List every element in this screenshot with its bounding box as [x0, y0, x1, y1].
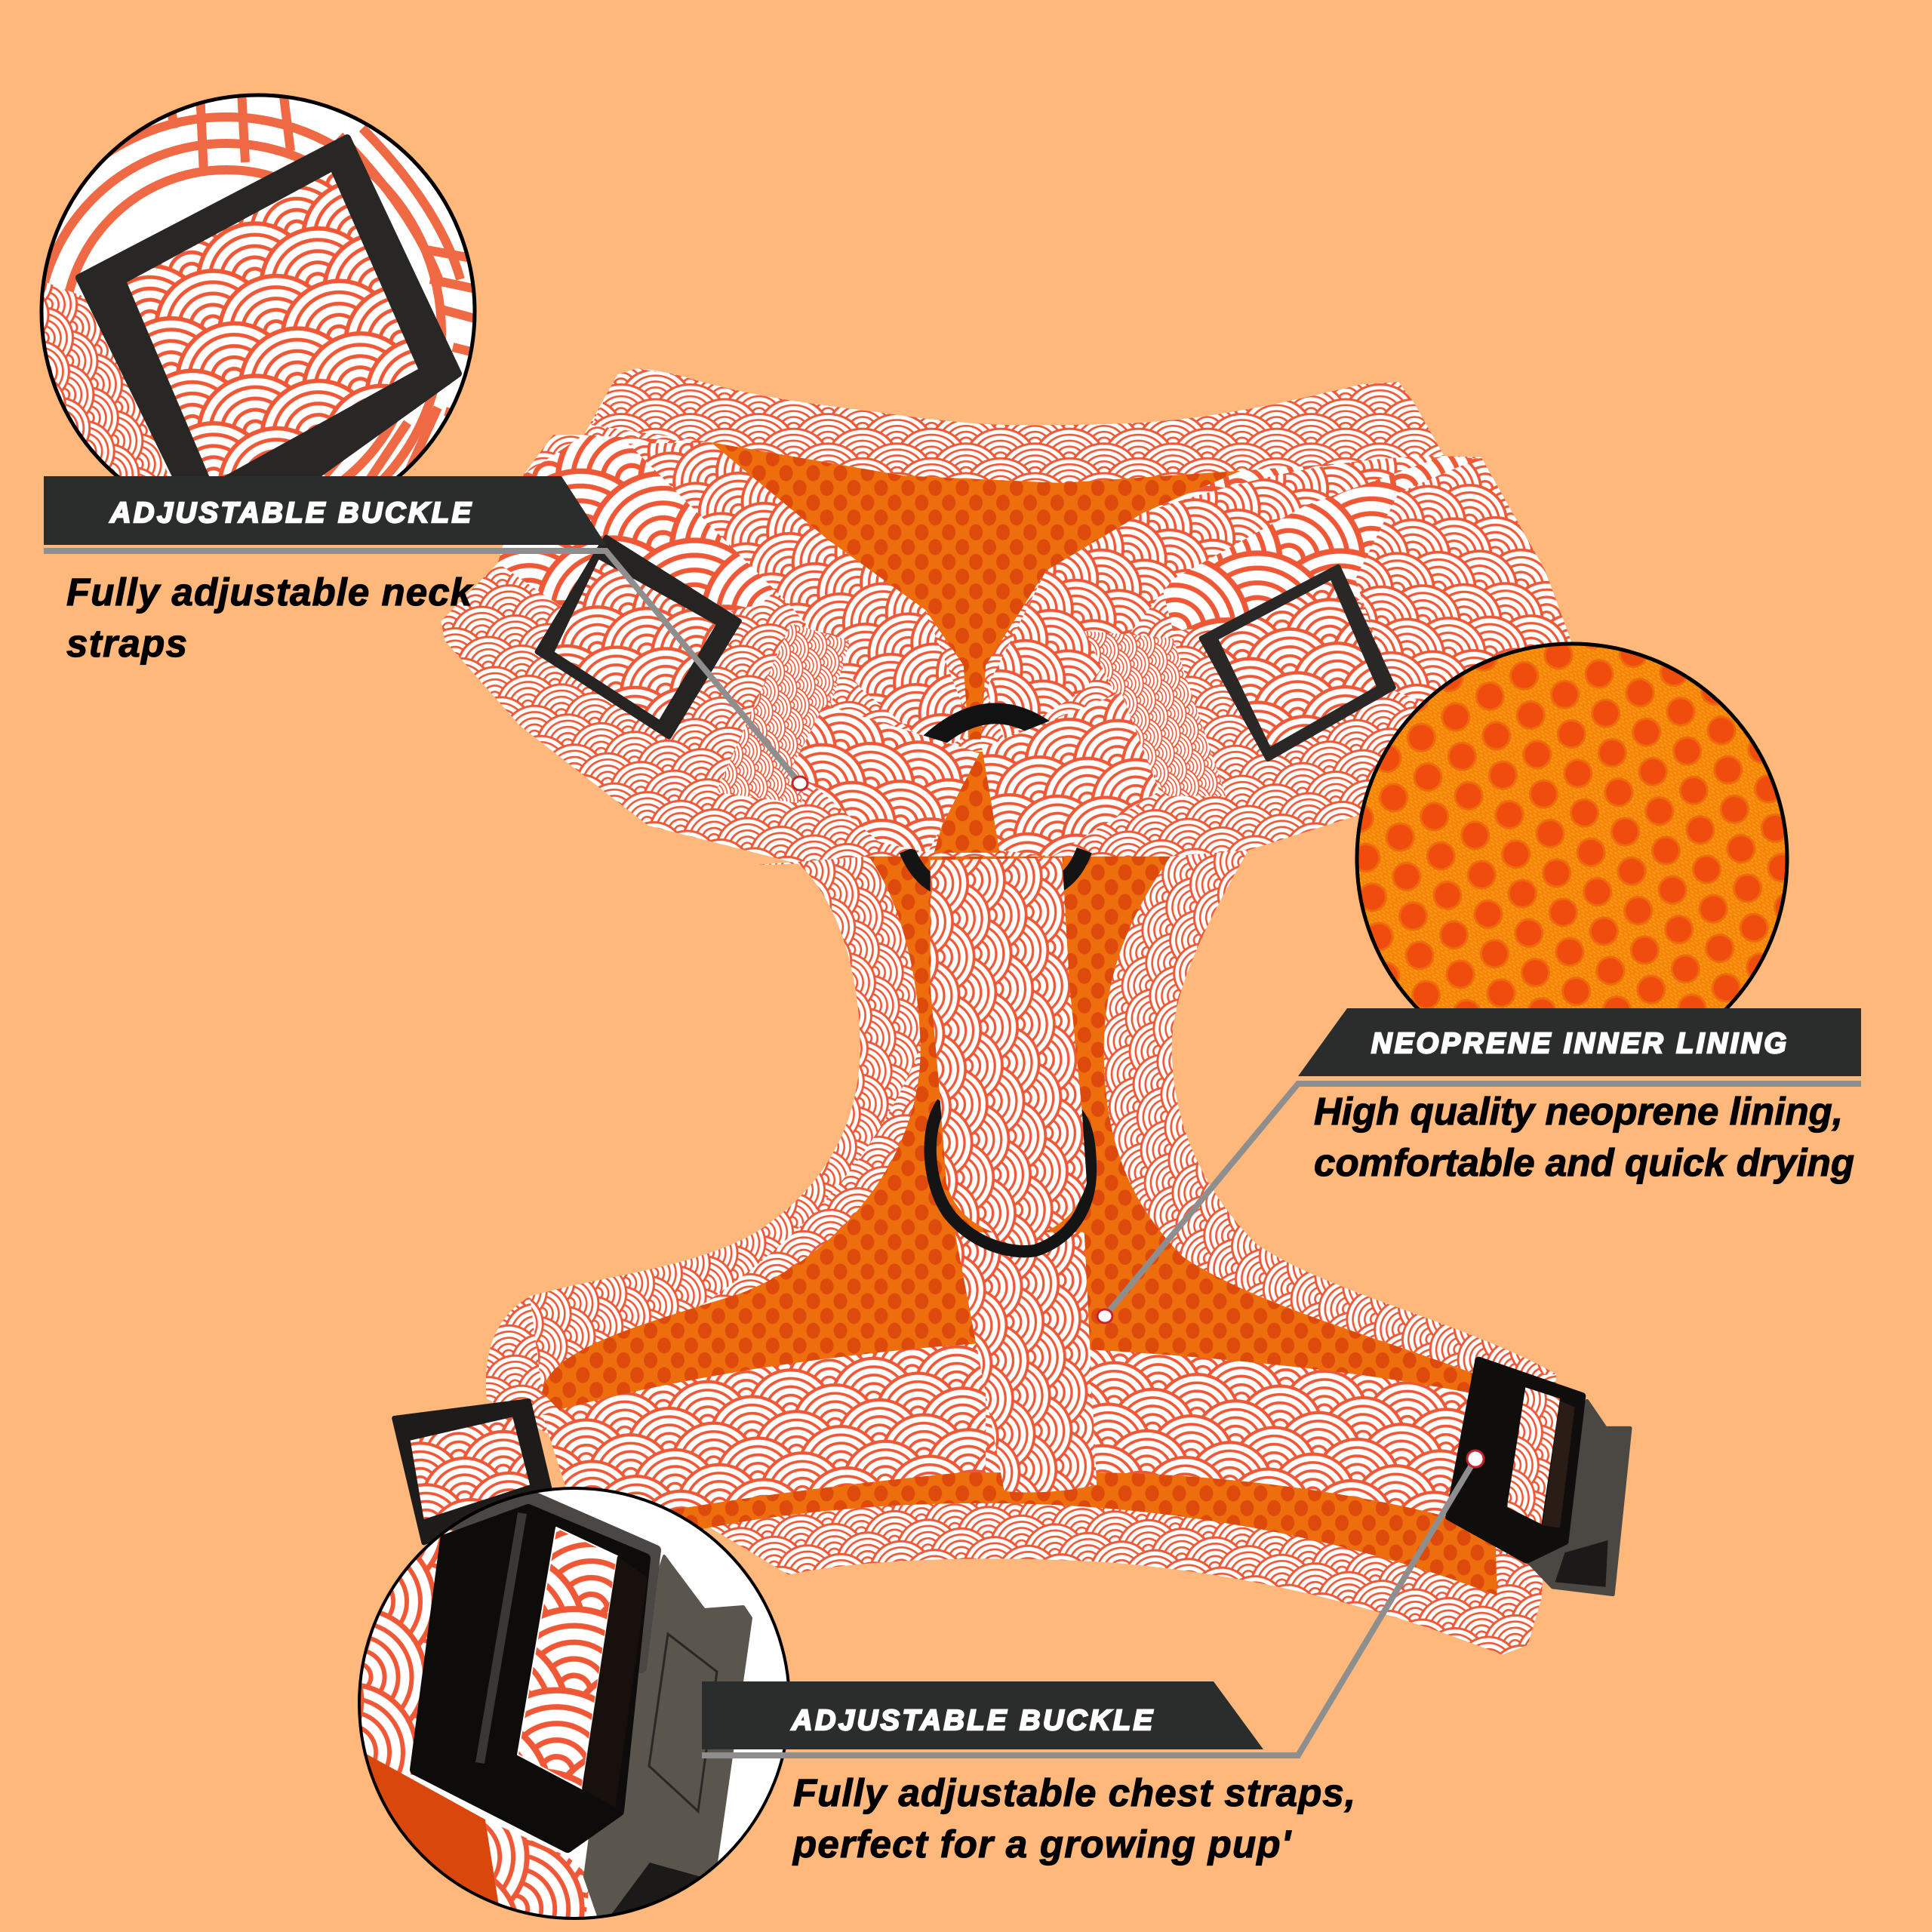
collar band: [592, 368, 1444, 485]
right neck buckle: [1201, 567, 1394, 759]
description: neck straps: straps: [66, 622, 187, 665]
banner: neoprene inner lining: [1298, 1008, 1861, 1076]
description: chest straps: perfect for a growing pup': [792, 1823, 1292, 1866]
inset circle: neck buckle close-up: [39, 94, 477, 476]
upper left inner band: [629, 442, 974, 752]
armhole binding right: [1104, 851, 1556, 1380]
description: neoprene lining: High quality neoprene lining,: [1314, 1090, 1843, 1133]
banner: adjustable buckle chest: [702, 1681, 1263, 1749]
left neck buckle: [537, 537, 740, 737]
description: neoprene lining: comfortable and quick drying: [1314, 1141, 1854, 1184]
left knot: [792, 705, 980, 853]
glossy frame: [415, 1509, 645, 1847]
description: chest straps: Fully adjustable chest straps,: [793, 1771, 1355, 1814]
right far flap: [1355, 457, 1571, 740]
large fabric arcs: [45, 97, 472, 476]
left side fabric: [44, 282, 168, 476]
right neck fine strap: [1084, 631, 1226, 796]
harness body silhouette: [441, 368, 1571, 1655]
center strap lower: [955, 1232, 1097, 1492]
top rim: [453, 1494, 656, 1668]
callout leader: chest buckle: [702, 1451, 1484, 1755]
plastic body: [585, 1556, 751, 1924]
inset circle: chest buckle close-up: [355, 1487, 789, 1924]
buckle frame: [75, 134, 462, 476]
description: neoprene lining: [1314, 1090, 1854, 1184]
upper right inner band: [986, 456, 1444, 740]
d-ring: [931, 1103, 1091, 1251]
mesh lining: body: [542, 857, 1497, 1595]
armhole binding left: [530, 857, 921, 1392]
banner: neoprene inner lining: NEOPRENE INNER LINING: [1371, 1028, 1786, 1060]
mesh: [367, 1754, 498, 1903]
center strap upper: [931, 857, 1087, 1238]
right chest buckle: [1449, 1361, 1630, 1595]
gloss highlight: [480, 1513, 522, 1763]
callout leader: neck buckle: [44, 551, 808, 790]
inset circle: mesh lining close-up: [1357, 644, 1787, 1074]
harness product: [394, 368, 1630, 1655]
callout leader: mesh lining: [1097, 1084, 1861, 1323]
description: neck straps: [66, 571, 474, 665]
o-ring lower: [907, 851, 1084, 888]
chest strap right: [986, 1343, 1497, 1521]
buckle window: [518, 1527, 617, 1789]
right knot: [982, 693, 1159, 857]
left fabric: [361, 1529, 454, 1775]
upper right large pattern strap: [1143, 456, 1478, 631]
upper left large pattern strap: [498, 435, 828, 641]
left neck fine strap: [716, 623, 851, 804]
banner: adjustable buckle neck: ADJUSTABLE BUCKLE: [109, 497, 472, 529]
chest strap left: [542, 1343, 986, 1528]
description: chest straps: [792, 1771, 1355, 1866]
banner: adjustable buckle chest: ADJUSTABLE BUCKLE: [791, 1705, 1154, 1737]
lower strap: [485, 1820, 590, 1924]
left chest buckle: [394, 1401, 549, 1543]
o-ring upper: [927, 713, 1065, 746]
banner: adjustable buckle neck: [44, 476, 606, 545]
mesh lining: neck: [711, 442, 1241, 740]
mesh between straps: [934, 752, 1001, 853]
description: neck straps: Fully adjustable neck: [66, 571, 474, 614]
